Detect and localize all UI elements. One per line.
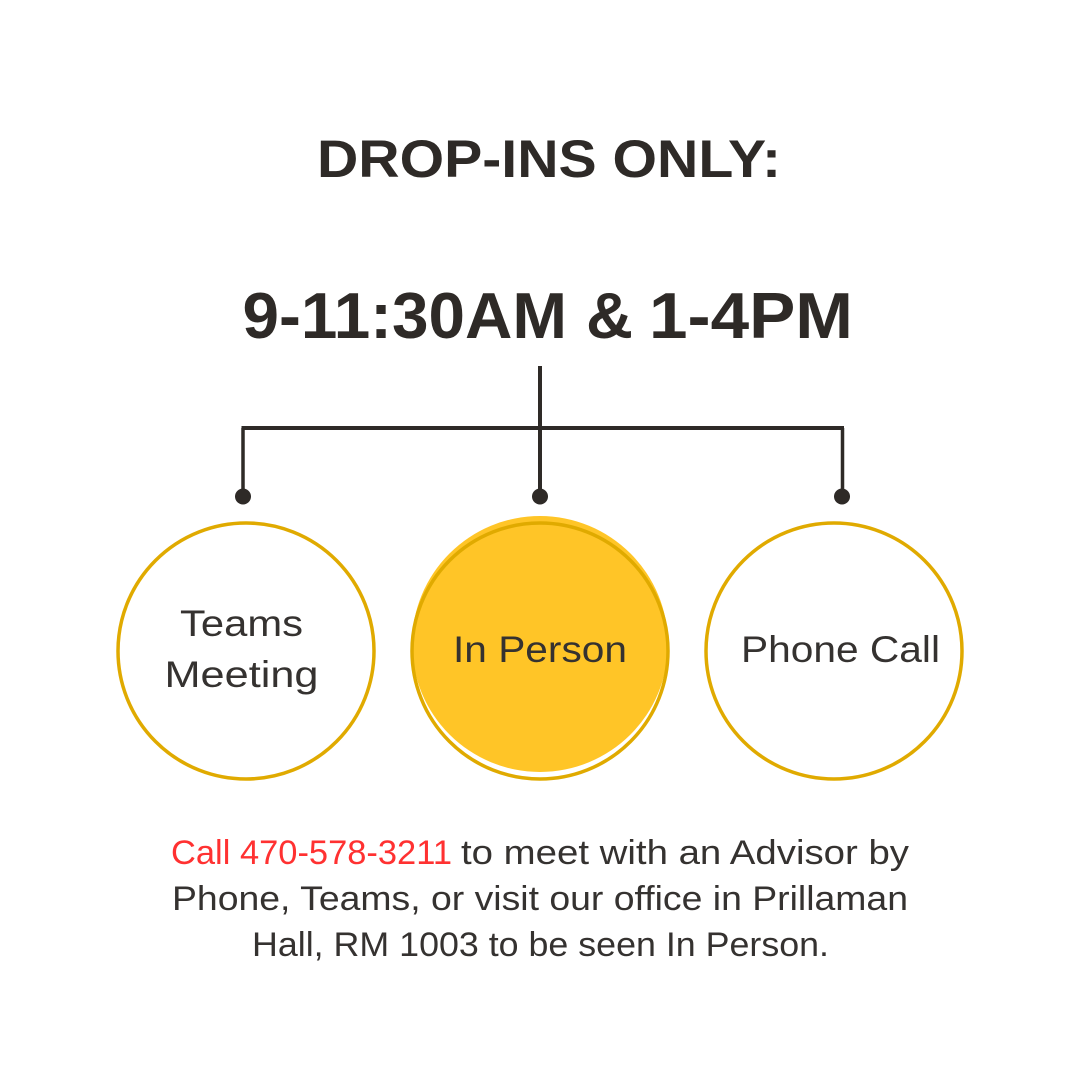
connector diagram	[235, 366, 850, 504]
circle fill: in person	[412, 516, 668, 772]
label: teams meeting: Meeting	[164, 654, 318, 695]
body text: to meet with an Advisor by	[461, 834, 909, 872]
circle outline: in person	[412, 523, 668, 779]
hours heading	[242, 279, 853, 352]
circle: teams meeting	[118, 523, 374, 779]
hours heading: 1-4PM	[649, 279, 853, 352]
circle: phone call	[706, 523, 962, 779]
hours heading: 9-11:30AM	[242, 279, 567, 352]
body text: Hall, RM 1003 to be seen In Person.	[252, 926, 829, 964]
title: DROP-INS ONLY:	[317, 130, 781, 189]
label: phone call: Phone Call	[741, 629, 940, 670]
label: teams meeting	[164, 603, 318, 695]
label: teams meeting: Teams	[180, 603, 303, 644]
body text: Phone, Teams, or visit our office in Prillaman	[172, 880, 908, 918]
body text	[171, 834, 909, 964]
label: in person: In Person	[453, 629, 627, 670]
body text: Call 470-578-3211	[171, 834, 452, 872]
hours heading: &	[586, 279, 633, 352]
